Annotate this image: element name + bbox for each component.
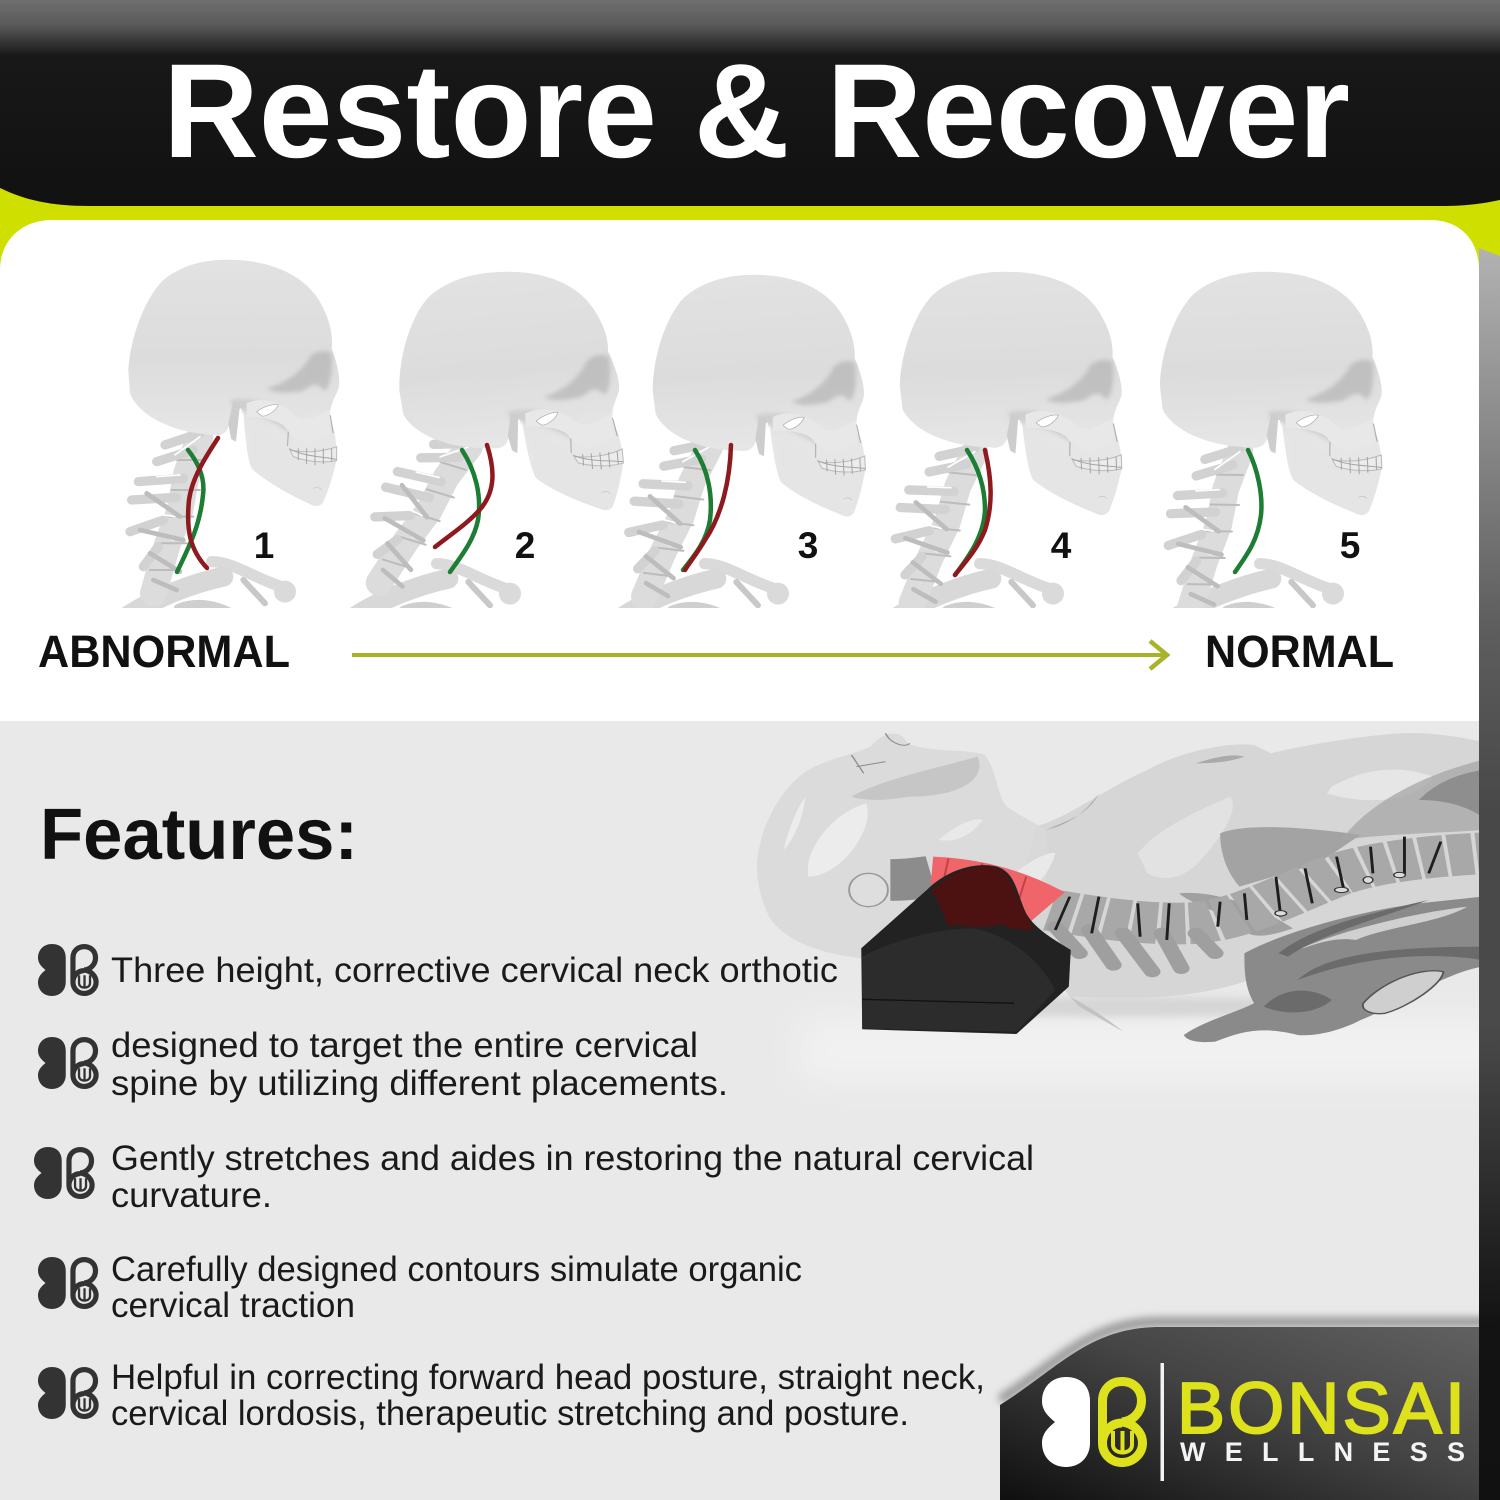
feature text: Carefully designed contours simulate organic [111,1250,802,1289]
header band [0,0,1500,206]
feature text: Three height, corrective cervical neck orthotic [111,951,838,990]
head [757,733,1047,958]
label: normal: NORMAL [1205,626,1394,677]
right side strip [1479,248,1500,1500]
torso [1012,733,1482,998]
skeleton 4 [889,268,1126,619]
brand logo [1042,1363,1465,1481]
panel: features [0,721,1479,1500]
curve: abnormal and normal 4 [955,450,991,575]
feature text: cervical lordosis, therapeutic stretching and posture. [111,1394,909,1433]
translucent mid back dark [1179,893,1293,936]
brand sub name: WELLNESS [1180,1437,1465,1467]
curve: abnormal and normal 3 [683,445,731,570]
stage numbers: 5 [1340,525,1360,566]
curve: normal 5 [1235,450,1261,572]
spine [890,853,1482,924]
feature text: curvature. [111,1176,272,1215]
feature text [111,1250,802,1325]
feature text: designed to target the entire cervical [111,1026,698,1065]
panel: spine progression [0,220,1479,721]
skeleton 2 [352,263,630,619]
heading: features: Features: [40,795,358,875]
illustration: body on neck orthotic [757,733,1482,1042]
stage numbers: 1 [254,525,274,566]
feature text: Gently stretches and aides in restoring the natural cervical [111,1139,1034,1178]
bullet icon [34,1147,92,1199]
dark arm and shoulder [1220,827,1361,887]
bullet icon [38,944,96,996]
logo divider [1160,1363,1164,1481]
floor highlight [836,1044,1477,1056]
label: abnormal: ABNORMAL [38,626,290,677]
title: Restore & Recover [163,37,1350,186]
feature text [111,1358,985,1433]
feature 3 [34,1139,1034,1215]
bullet icon [38,1037,96,1089]
arrow: abnormal to normal [352,641,1167,669]
bullet icon [38,1257,96,1309]
logo mark [1042,1377,1142,1467]
skeleton 5 [1156,268,1386,619]
badge shadow [1000,1322,1490,1400]
feature text: Helpful in correcting forward head posture, straight neck, [111,1358,985,1397]
panel: brand badge [1000,1327,1479,1500]
stage numbers: 3 [798,525,818,566]
curve: abnormal and normal 1 [177,438,218,572]
bullet icon [38,1367,96,1419]
feature 5 [38,1358,985,1433]
feature text: cervical traction [111,1286,355,1325]
stage numbers [254,525,1360,566]
stage numbers: 2 [515,525,535,566]
feature text [111,1139,1034,1215]
orthotic block [861,865,1071,1034]
skeleton 1 [127,260,339,617]
feature 1 [38,944,838,996]
skeleton 3 [620,269,870,619]
stage numbers: 4 [1051,525,1072,566]
feature 2 [38,1026,728,1103]
feature 4 [38,1250,802,1325]
floor shadow [1036,996,1254,1018]
brand name: BONSAI [1177,1369,1465,1449]
feature text [111,1026,728,1103]
feature text: spine by utilizing different placements. [111,1064,728,1103]
curve: abnormal and normal 2 [435,445,492,572]
